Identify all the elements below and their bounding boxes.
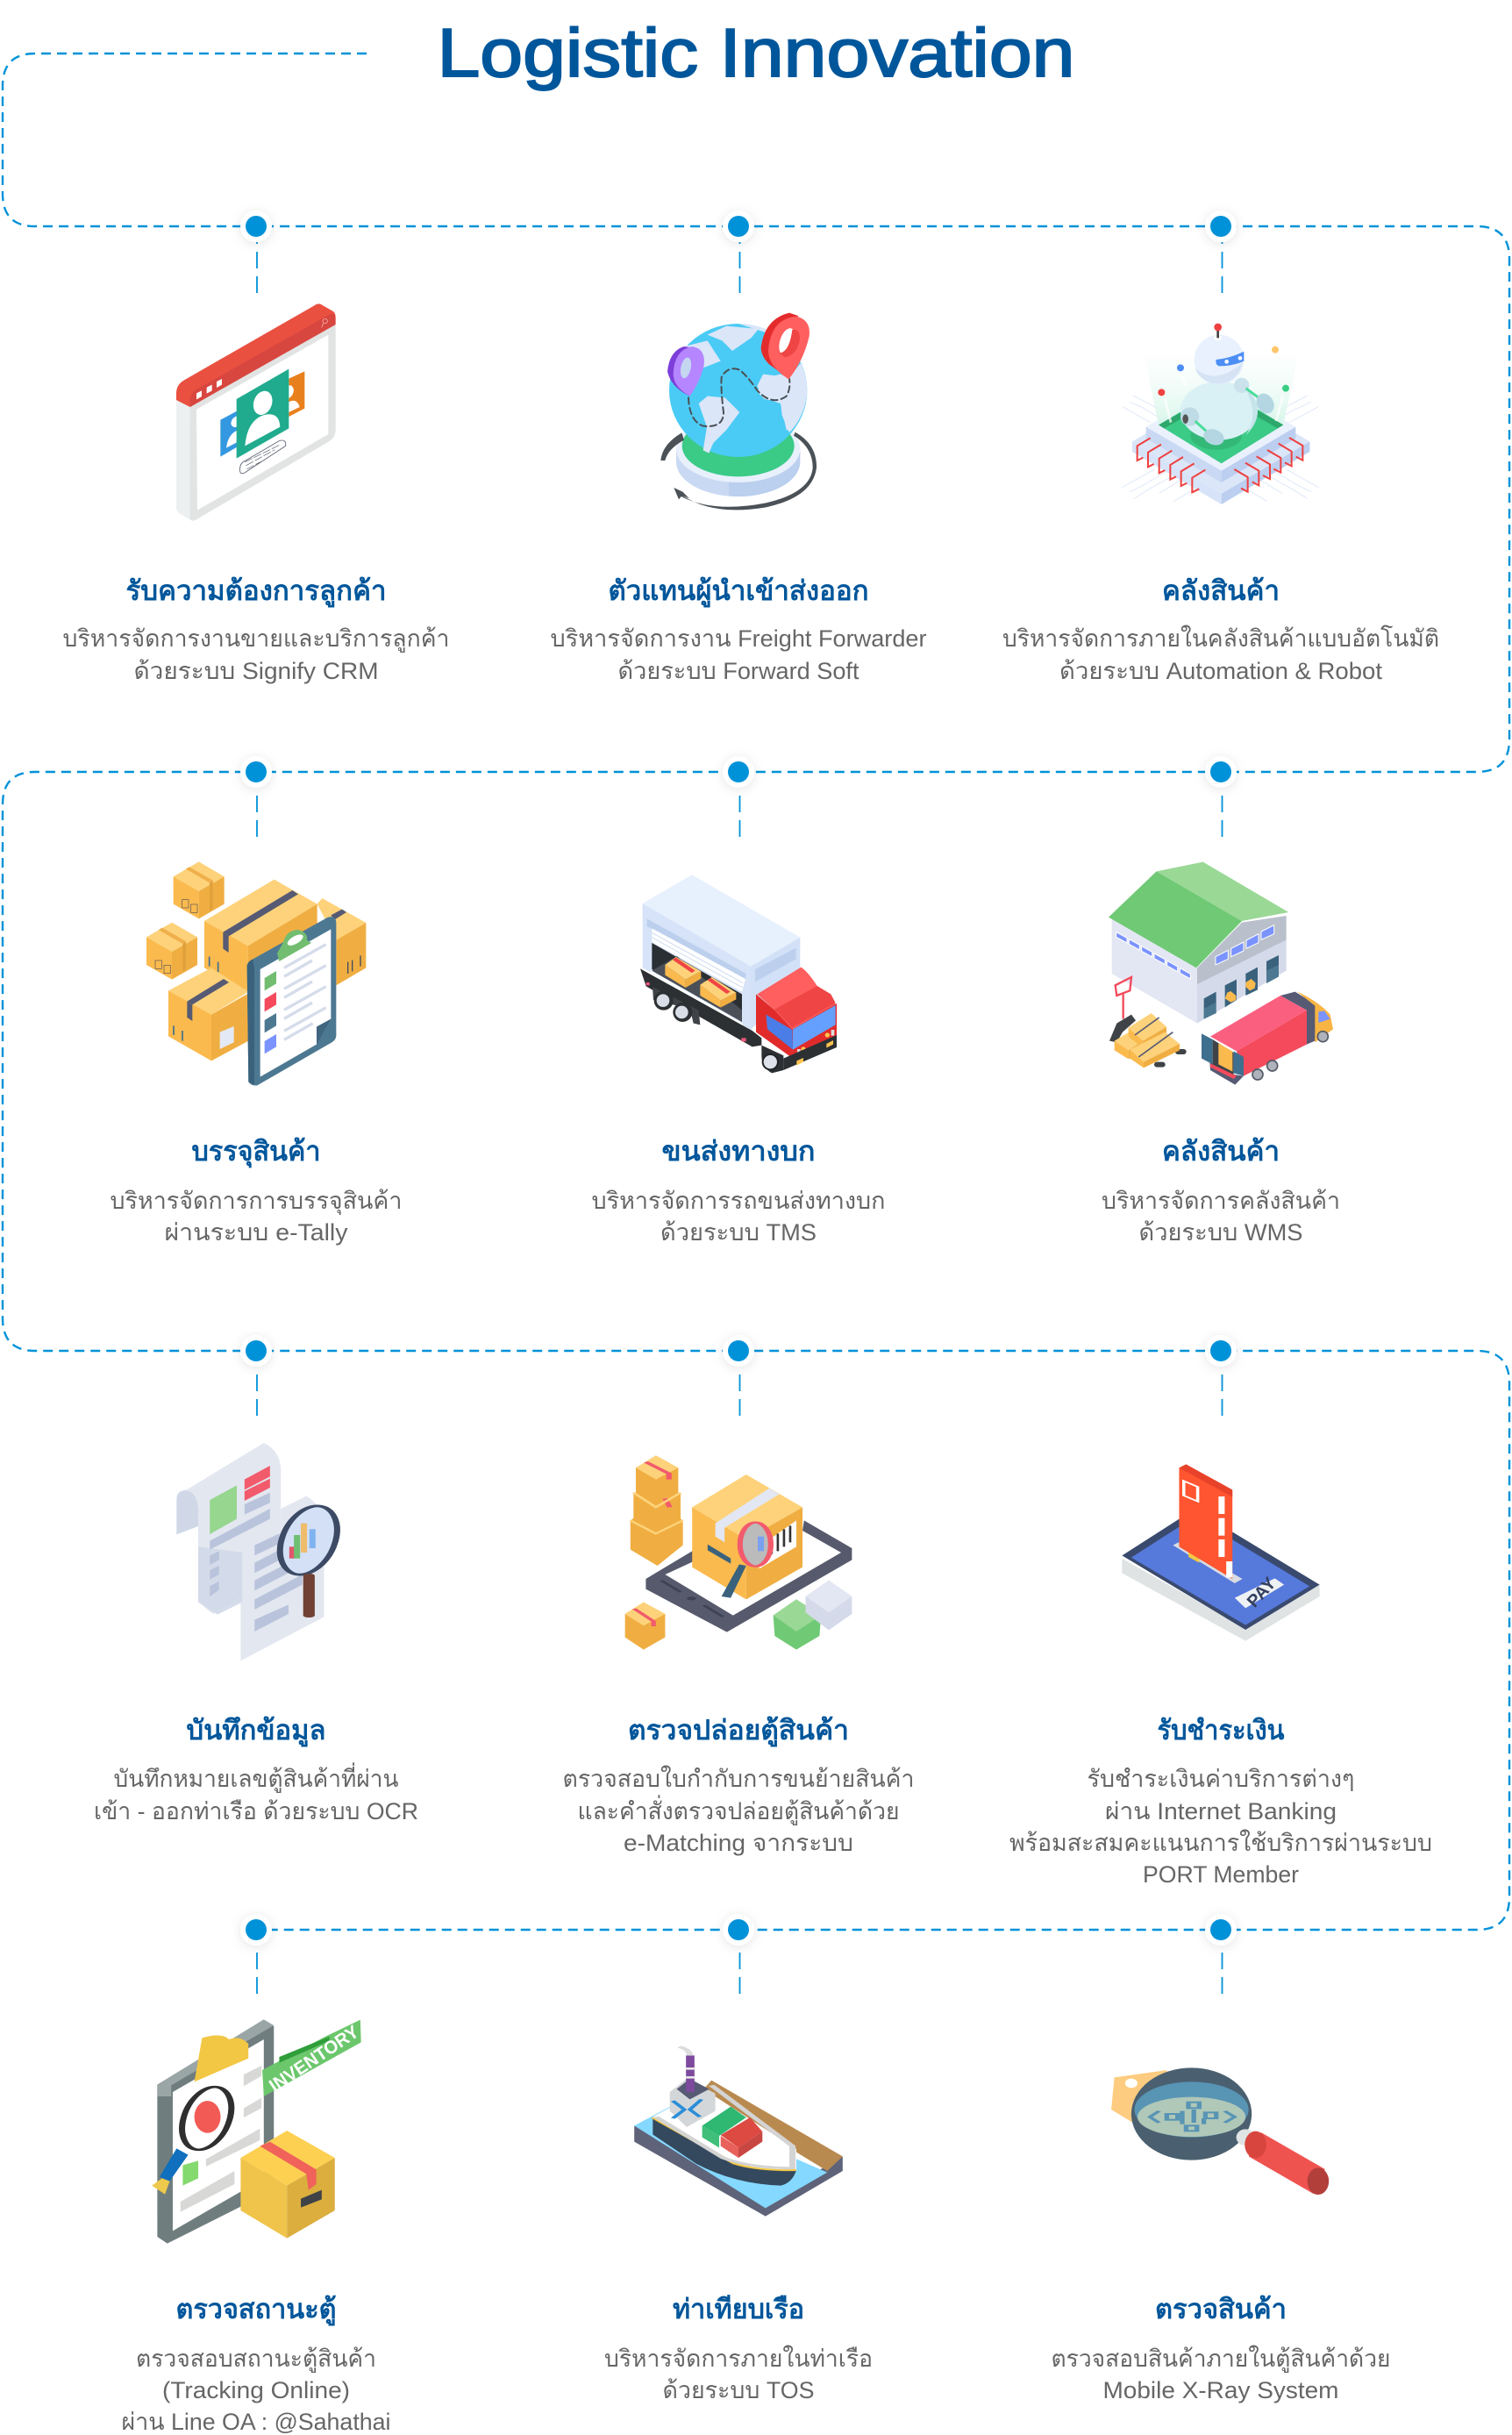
text block: บริหารจัดการงาน Freight Forwarder [551,625,926,652]
text block: บริหารจัดการภายในคลังสินค้าแบบอัตโนมัติ [1002,625,1439,652]
text block: ด้วยระบบ TOS [663,2377,814,2403]
panel: port terminal [604,2046,873,2403]
panel: customer request [63,303,449,684]
text block: ตรวจสอบสินค้าภายในตู้สินค้าด้วย [1051,2345,1391,2373]
heading: รับชำระเงิน [1158,1715,1284,1746]
connector: dashed timeline path [3,54,1509,1930]
title: Logistic Innovation [437,14,1075,91]
text block: บริหารจัดการการบรรจุสินค้า [111,1188,402,1216]
text block [121,2346,391,2435]
text block [551,625,926,684]
text block: บริหารจัดการรถขนส่งทางบก [591,1188,886,1214]
panel: payment [1009,1464,1432,1888]
heading: คลังสินค้า [1162,575,1280,606]
text block [1009,1766,1432,1888]
icon: X-ray magnifier [1111,2067,1329,2195]
text block: บริหารจัดการคลังสินค้า [1102,1188,1340,1214]
text block [604,2345,873,2403]
icon: phone with credit card [1122,1464,1320,1641]
heading: บันทึกข้อมูล [186,1715,326,1747]
panel: land transport [591,875,886,1246]
icon: container ship at dock [634,2046,843,2217]
heading: ตรวจสถานะตู้ [175,2294,337,2326]
text block: ด้วยระบบ TMS [660,1219,817,1246]
text block: ด้วยระบบ Signify CRM [133,658,379,684]
text block: ตรวจสอบสถานะตู้สินค้า [136,2346,376,2373]
text block: (Tracking Online) [162,2377,350,2403]
heading: รับความต้องการลูกค้า [126,575,386,608]
text block [1102,1188,1340,1246]
text block: PORT Member [1143,1861,1299,1888]
panel: customs release [563,1455,914,1856]
text block [1002,625,1439,684]
text block: Mobile X-Ray System [1103,2377,1338,2403]
text block: ด้วยระบบ Automation & Robot [1059,658,1382,684]
text block: ด้วยระบบ WMS [1138,1219,1303,1246]
icon: tablet with parcels and barcode scan [625,1455,852,1650]
text block: e-Matching จากระบบ [624,1830,853,1856]
icon: robot on microchip [1122,324,1318,504]
panel: cargo inspection [1051,2067,1391,2403]
text block: บริหารจัดการงานขายและบริการลูกค้า [63,625,449,653]
text block: ผ่าน Line OA : @Sahathai [121,2409,391,2435]
heading: บรรจุสินค้า [191,1136,321,1168]
text block: เข้า - ออกท่าเรือ ด้วยระบบ OCR [94,1798,418,1824]
panel: freight forwarder [551,313,926,684]
text block: บันทึกหมายเลขตู้สินค้าที่ผ่าน [114,1762,398,1793]
text block [94,1762,418,1824]
text block [563,1765,914,1856]
label: PAY button text: PAY [1244,1574,1280,1611]
text block [63,625,449,684]
text block [111,1188,402,1246]
heading: ขนส่งทางบก [661,1136,816,1167]
text block: ด้วยระบบ Forward Soft [617,658,859,684]
label: inventory tag text: INVENTORY [266,2022,363,2096]
panel: warehouse [1102,862,1340,1246]
panel: packing [111,861,402,1246]
text block: พร้อมสะสมคะแนนการใช้บริการผ่านระบบ [1009,1829,1432,1856]
text block: ผ่านระบบ e-Tally [165,1219,348,1246]
text block: ตรวจสอบใบกำกับการขนย้ายสินค้า [563,1765,914,1792]
panel: data recording [94,1443,418,1824]
heading: ตรวจปล่อยตู้สินค้า [628,1715,849,1747]
heading: ตรวจสินค้า [1155,2294,1287,2324]
icon: boxes and clipboard [146,861,366,1085]
icon: browser window with contacts [176,303,336,521]
text block [1051,2345,1391,2403]
text block: และคำสั่งตรวจปล่อยตู้สินค้าด้วย [577,1795,900,1825]
heading: คลังสินค้า [1162,1136,1280,1167]
text block [591,1188,886,1246]
icon: documents with magnifier [176,1443,345,1660]
text block: ผ่าน Internet Banking [1105,1798,1337,1824]
icon: delivery truck [640,875,837,1073]
heading: ท่าเทียบเรือ [673,2294,804,2324]
icon: inventory clipboard [152,2019,361,2244]
icon: warehouse and truck [1109,862,1333,1085]
heading: ตัวแทนผู้นำเข้าส่งออก [609,575,868,608]
icon: globe with location pins [660,313,817,510]
panel: automated warehouse [1002,324,1439,684]
text block: รับชำระเงินค่าบริการต่างๆ [1088,1766,1354,1792]
timeline nodes [240,211,1237,1946]
text block: บริหารจัดการภายในท่าเรือ [604,2345,873,2372]
connector: vertical drop lines [257,242,1223,1994]
panel: container status [121,2019,391,2435]
